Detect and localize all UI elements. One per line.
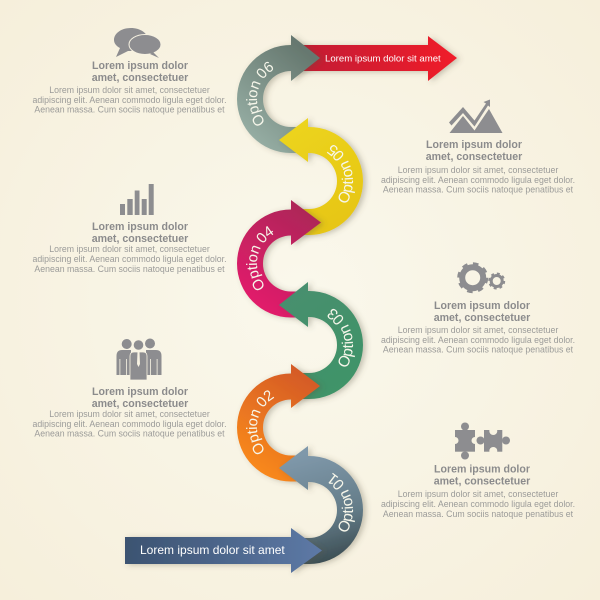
arrow: option 05	[279, 118, 369, 240]
text block: lower right: Aenean massa. Cum sociis natoque penatibus et	[383, 509, 574, 519]
text block: middle right: Aenean massa. Cum sociis natoque penatibus et	[383, 344, 574, 354]
text block: lower left	[32, 386, 227, 438]
arrow: bottom blue banner	[125, 528, 322, 573]
text block: lower right: amet, consectetuer	[434, 476, 530, 488]
text block: lower left: Lorem ipsum dolor sit amet, consectetuer	[49, 409, 210, 419]
arrow: option 01	[279, 446, 369, 568]
text block: upper right: Lorem ipsum dolor	[426, 139, 522, 151]
text block: middle left	[32, 221, 227, 274]
icon: speech bubbles	[114, 28, 161, 58]
text block: lower right: Lorem ipsum dolor	[434, 464, 530, 476]
text block: upper right	[381, 139, 575, 194]
text block: middle right: amet, consectetuer	[434, 312, 530, 324]
text block: middle right: adipiscing elit. Aenean commodo ligula eget dolor.	[381, 335, 575, 345]
text block: lower left: adipiscing elit. Aenean commodo ligula eget dolor.	[32, 419, 227, 429]
icon: gears	[459, 264, 504, 291]
arrow: option 04	[236, 200, 324, 322]
text block: upper right: adipiscing elit. Aenean commodo ligula eget dolor.	[381, 175, 575, 185]
text block: top left: Lorem ipsum dolor	[92, 60, 188, 72]
label: option 01: Option 01	[328, 472, 355, 532]
arrow: top red banner	[295, 36, 457, 81]
text block: top left: adipiscing elit. Aenean commodo ligula eget dolor.	[32, 95, 227, 105]
label: option 05: Option 05	[326, 145, 355, 203]
text block: top left: Aenean massa. Cum sociis natoque penatibus et	[34, 104, 225, 114]
text block: middle right	[381, 300, 575, 354]
text block: middle left: adipiscing elit. Aenean commodo ligula eget dolor.	[32, 254, 227, 264]
text block: lower right	[381, 464, 575, 519]
text block: middle left: Aenean massa. Cum sociis natoque penatibus et	[34, 264, 225, 274]
text block: top left	[32, 60, 227, 114]
label: option 03: Option 03	[328, 308, 355, 367]
text block: middle right: Lorem ipsum dolor sit amet, consectetuer	[398, 325, 558, 335]
text block: upper right: Lorem ipsum dolor sit amet, consectetuer	[398, 165, 558, 175]
text block: lower left: Aenean massa. Cum sociis natoque penatibus et	[34, 428, 225, 438]
label: option 06: Option 06	[246, 62, 274, 126]
text block: lower right: Lorem ipsum dolor sit amet, consectetuer	[398, 489, 558, 499]
text block: upper right: amet, consectetuer	[426, 151, 522, 163]
text block: middle left: amet, consectetuer	[92, 233, 188, 245]
icon: team of people	[116, 338, 162, 380]
arrow: option 03	[279, 282, 369, 404]
label: option 02: Option 02	[246, 390, 274, 454]
text block: upper right: Aenean massa. Cum sociis natoque penatibus et	[383, 184, 574, 194]
banner label: Lorem ipsum dolor sit amet	[140, 543, 285, 557]
label: option 04: Option 04	[246, 226, 274, 290]
text block: top left: amet, consectetuer	[92, 72, 188, 84]
icon: bar chart	[120, 184, 154, 215]
arrow: option 06	[236, 35, 322, 158]
text block: lower left: amet, consectetuer	[92, 398, 188, 410]
icon: puzzle pieces	[452, 422, 510, 460]
icon: mountain with rising arrow	[449, 100, 502, 133]
text block: middle left: Lorem ipsum dolor sit amet, consectetuer	[49, 244, 210, 254]
text block: middle right: Lorem ipsum dolor	[434, 300, 530, 312]
text block: middle left: Lorem ipsum dolor	[92, 221, 188, 233]
text block: top left: Lorem ipsum dolor sit amet, consectetuer	[49, 85, 210, 95]
arrow: option 02	[236, 364, 321, 486]
banner label: Lorem ipsum dolor sit amet	[325, 54, 441, 64]
text block: lower right: adipiscing elit. Aenean commodo ligula eget dolor.	[381, 499, 575, 509]
text block: lower left: Lorem ipsum dolor	[92, 386, 188, 398]
